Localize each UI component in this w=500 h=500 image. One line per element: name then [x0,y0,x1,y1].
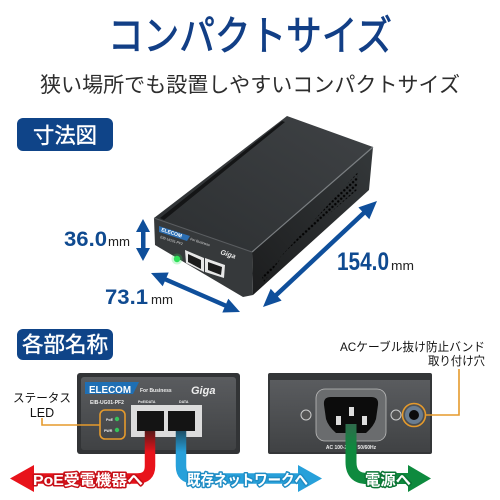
label: width: mm [151,292,173,307]
device: front panel: PWR [104,429,113,433]
device: front panel: PoE [106,418,114,422]
ventilation holes [262,172,358,282]
device: front panel: DATA [179,400,189,404]
arrow: length [263,201,377,307]
callout: AC cable band hole: 取り付け穴 [428,354,485,368]
top face [154,116,373,252]
callout: status LED: ステータス [13,391,71,405]
arrow: width [151,272,240,312]
side face [252,147,373,295]
label: width: 73.1 [105,286,148,309]
arrow: height [136,219,150,261]
arrow: existing network (blue) [181,431,322,492]
brand strip [159,226,190,241]
device: rear panel: AC 100-240V 50/60Hz [326,445,377,451]
device photo: perspective view: ELECOM [160,227,183,240]
logo [85,382,139,394]
arrow: PoE devices (red) [10,431,150,492]
device photo: perspective view: For Business [190,237,211,247]
inlet plate [316,389,386,441]
badge: part names heading [17,329,113,360]
band hole [405,406,423,424]
label: width [105,286,173,309]
inlet [324,397,378,433]
callout: status LED: LED [30,406,54,420]
device: front panel [77,373,240,454]
device: front panel: EIB-UG01-PF2 [90,400,124,406]
arrow: PoE devices (red): PoE受電機器へ [33,471,143,489]
device: front panel: Giga [191,385,215,397]
device: front panel: For Business [140,388,172,394]
device photo: perspective view [154,116,373,297]
callout: AC cable band hole [340,339,485,426]
front face [154,218,253,297]
arrow: power (green): 電源へ [365,472,411,489]
label: height: mm [108,234,130,249]
arrow: power (green) [351,424,431,492]
port frames [131,405,202,437]
label: length: mm [391,258,414,273]
status LED [174,256,180,262]
device: front panel: ELECOM [89,385,131,396]
device: front panel: PoE/DATA [138,400,156,404]
badge: dimensions heading [17,118,113,151]
screws [301,410,311,420]
status LEDs [115,417,119,421]
device photo: perspective view: EIB-UG01-PF2 [160,235,183,246]
callout: AC cable band hole: ACケーブル抜け防止バンド [340,339,485,354]
badge: dimensions heading: 寸法図 [33,124,97,148]
device photo: perspective view: Giga [219,249,236,261]
LAN ports [185,250,204,272]
device: rear panel [268,373,432,454]
callout: status LED [13,391,125,439]
label: height: 36.0 [64,228,107,251]
subtitle: 狭い場所でも設置しやすいコンパクトサイズ [40,74,460,97]
title: コンパクトサイズ [108,13,392,59]
badge: part names heading: 各部名称 [22,333,108,357]
arrow: existing network (blue): 既存ネットワークへ [187,471,308,489]
label: height [64,228,130,251]
label: length: 154.0 [337,248,389,276]
